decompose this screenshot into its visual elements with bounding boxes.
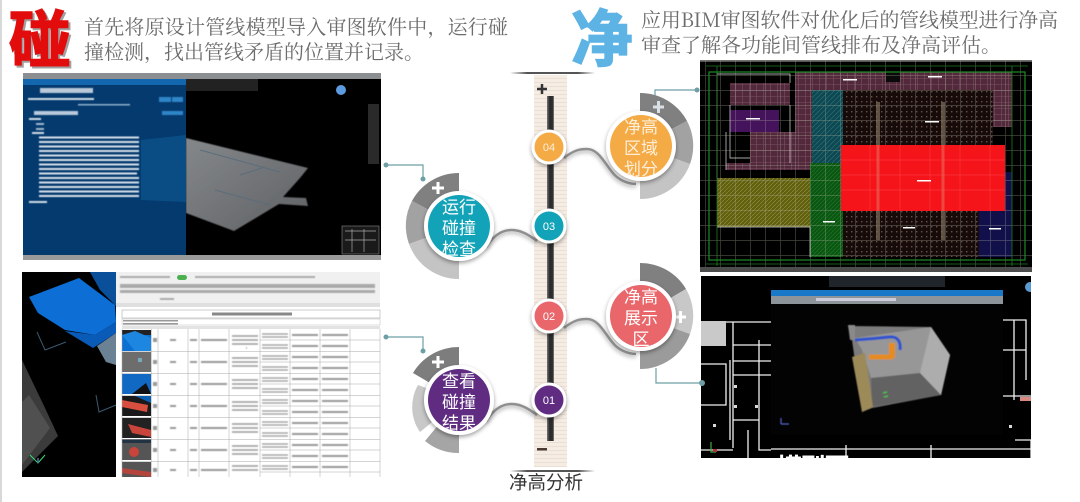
zone: yellow (717, 178, 810, 227)
label: 区 (632, 330, 650, 349)
connector: room to 净高展示区 (656, 368, 705, 386)
view controls (336, 85, 379, 254)
toolbar (829, 276, 945, 287)
text block: collision check intro: 撞检测，找出管线矛盾的位置并记录。 (84, 36, 424, 65)
screenshot: collision results (22, 272, 380, 477)
label: 碰撞 (442, 219, 476, 238)
text block: clear height intro: 应用BIM审图软件对优化后的管线模型进行净高 (641, 4, 1058, 33)
label: 结果 (442, 414, 476, 433)
zone: navy (979, 172, 1012, 257)
link curve (486, 230, 537, 247)
label: 展示 (624, 309, 658, 328)
bottom shadow line (510, 470, 595, 472)
ring segments (412, 347, 459, 453)
top shadow line (510, 72, 595, 74)
3D room model (781, 325, 950, 424)
screenshot: clear height 3D room (701, 276, 1031, 458)
screenshot: collision check software (23, 73, 381, 260)
label (624, 118, 658, 179)
plus sign (537, 84, 547, 94)
clipped caption: BIM模型图 (735, 453, 850, 483)
heading icon: 碰: 碰 (11, 9, 73, 78)
text block: collision check intro (84, 11, 508, 65)
slider node 01 (532, 382, 566, 418)
label: 净高 (624, 288, 658, 307)
3D collision view (22, 272, 116, 477)
zone: green (810, 163, 843, 257)
slider node 04: 04 (543, 142, 555, 154)
dialog window (771, 290, 1003, 304)
floor plan: clear height zones (700, 60, 1032, 272)
node group: 运行碰撞检查 (406, 173, 537, 279)
thumbnails (122, 330, 151, 477)
label: 区域 (624, 139, 658, 158)
spreadsheet report (116, 272, 380, 477)
node group: 查看碰撞结果 (412, 347, 537, 453)
label: 运行 (442, 198, 476, 217)
connector: plan to 净高区域划分 (652, 88, 700, 108)
heading icon: 碰: 碰 (9, 7, 71, 76)
label (442, 372, 476, 433)
text block: collision check intro: 首先将原设计管线模型导入审图软件中，运行碰 (84, 11, 508, 40)
text block: clear height intro (641, 4, 1058, 58)
slider node 02 (532, 298, 566, 334)
heading icon: 净: 净 (571, 6, 633, 75)
label: 划分 (624, 160, 658, 179)
node group: 净高区域划分 (564, 93, 693, 199)
slider node 03 (532, 208, 566, 244)
slider node 03: 03 (543, 221, 555, 233)
label: 净高 (624, 118, 658, 137)
slider track (510, 72, 595, 472)
node group: 净高展示区 (564, 263, 693, 369)
zone: maroon rooms (726, 72, 1012, 170)
plan linework (701, 282, 1035, 458)
link curve (564, 149, 636, 184)
slider node 04 (532, 130, 566, 164)
ring segments (640, 93, 693, 199)
slider node 02: 02 (543, 311, 555, 323)
label: 碰撞 (442, 393, 476, 412)
slider node 01: 01 (543, 395, 555, 407)
label: 查看 (442, 372, 476, 391)
slider caption: 净高分析 (509, 472, 583, 493)
zone: purple (730, 110, 779, 132)
minus sign (537, 448, 547, 450)
3D floor model (186, 138, 308, 231)
zone: teal (812, 90, 843, 163)
label: 检查 (442, 240, 476, 259)
label (442, 198, 476, 259)
connector: screenshot to 运行碰撞检查 (384, 162, 426, 182)
software panel (23, 79, 186, 255)
connector: screenshot to 查看碰撞结果 (384, 334, 426, 354)
link curve (486, 404, 537, 421)
ring segments (640, 263, 693, 369)
ring segments (406, 173, 459, 279)
zone: red (841, 145, 1005, 211)
link curve (564, 319, 636, 354)
zone: dark ceiling area (843, 90, 993, 145)
text block: clear height intro: 审查了解各功能间管线排布及净高评估。 (641, 29, 1001, 58)
label (624, 288, 658, 349)
